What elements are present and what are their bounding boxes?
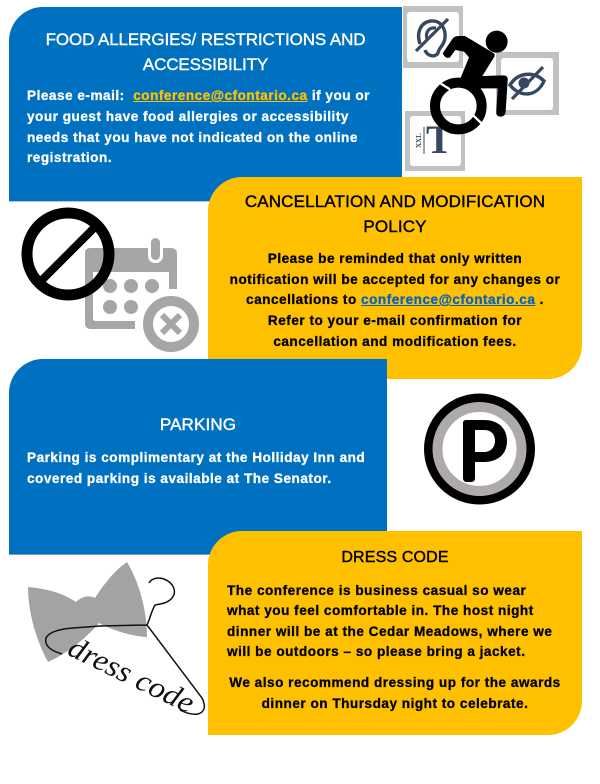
text: parking body: Parking is complimentary at the Holliday Inn and (27, 450, 365, 465)
heading: food allergies (46, 30, 365, 74)
text: dress code paragraph one: dinner will be at the Cedar Meadows, where we (227, 624, 552, 639)
icon: accessibility collage (403, 6, 559, 171)
panel: cancellation policy (208, 177, 582, 379)
heading: parking: PARKING (160, 415, 236, 434)
icon: bow tie (28, 562, 147, 662)
text: food allergies body: needs that you have not indicated on the online (27, 130, 358, 145)
heading: cancellation (245, 192, 545, 236)
icon: large text tile: XXL (415, 133, 423, 148)
heading: cancellation: POLICY (363, 217, 427, 236)
heading: cancellation: CANCELLATION AND MODIFICATION (245, 192, 545, 211)
icon: large text tile (405, 111, 465, 171)
text: food allergies body: registration. (27, 150, 112, 165)
text: dress code paragraph two: We also recommend dressing up for the awards (229, 675, 561, 690)
heading: food allergies: FOOD ALLERGIES/ RESTRICTIONS AND (46, 30, 365, 49)
text: cancellation body: notification will be accepted for any changes or (230, 272, 560, 287)
text: food allergies body: Please e-mail: conference@cfontario.ca if you or (27, 88, 370, 103)
text: cancellation body: cancellations to conference@cfontario.ca . (246, 292, 544, 307)
icon: hanger (46, 578, 204, 714)
text: cancellation body: Refer to your e-mail confirmation for (268, 313, 522, 328)
heading: dress code: DRESS CODE (341, 549, 449, 566)
text: food allergies body: your guest have food allergies or accessibility (27, 109, 349, 124)
text: food allergies body (26, 88, 370, 166)
text: dress code paragraph two: dinner on Thursday night to celebrate. (262, 696, 528, 711)
panel: dress code (208, 531, 582, 735)
text: cancellation body: Please be reminded that only written (268, 251, 522, 266)
panel: food allergies (9, 7, 402, 202)
text: dress code paragraph two (229, 675, 561, 712)
text: parking body (27, 450, 365, 486)
icon: wheelchair user (435, 31, 508, 129)
icon: calendar (85, 236, 177, 329)
panel: parking (9, 359, 387, 555)
text: dress code paragraph one: The conference is business casual so wear (227, 583, 526, 598)
icon: hearing tile (403, 6, 463, 68)
icon: prohibition sign (27, 213, 109, 295)
icon: dress code hanger with bow tie (28, 562, 206, 720)
heading: food allergies: ACCESSIBILITY (143, 55, 268, 74)
icon: large text tile: T (426, 117, 453, 162)
icon: vision tile (496, 52, 559, 115)
text: parking body: covered parking is available at The Senator. (27, 471, 332, 486)
text: cancellation body (230, 251, 560, 349)
text: cancellation body: cancellation and modification fees. (273, 334, 517, 349)
icon: x circle (140, 293, 202, 355)
text: dress code paragraph one: what you feel comfortable in. The host night (227, 603, 534, 618)
text: dress code script: dress code (63, 631, 200, 720)
icon: calendar cancelled (22, 208, 199, 352)
icon: parking sign (424, 394, 535, 504)
text: dress code paragraph one: will be outdoors – so please bring a jacket. (227, 644, 525, 659)
text: dress code paragraph one (226, 583, 552, 660)
